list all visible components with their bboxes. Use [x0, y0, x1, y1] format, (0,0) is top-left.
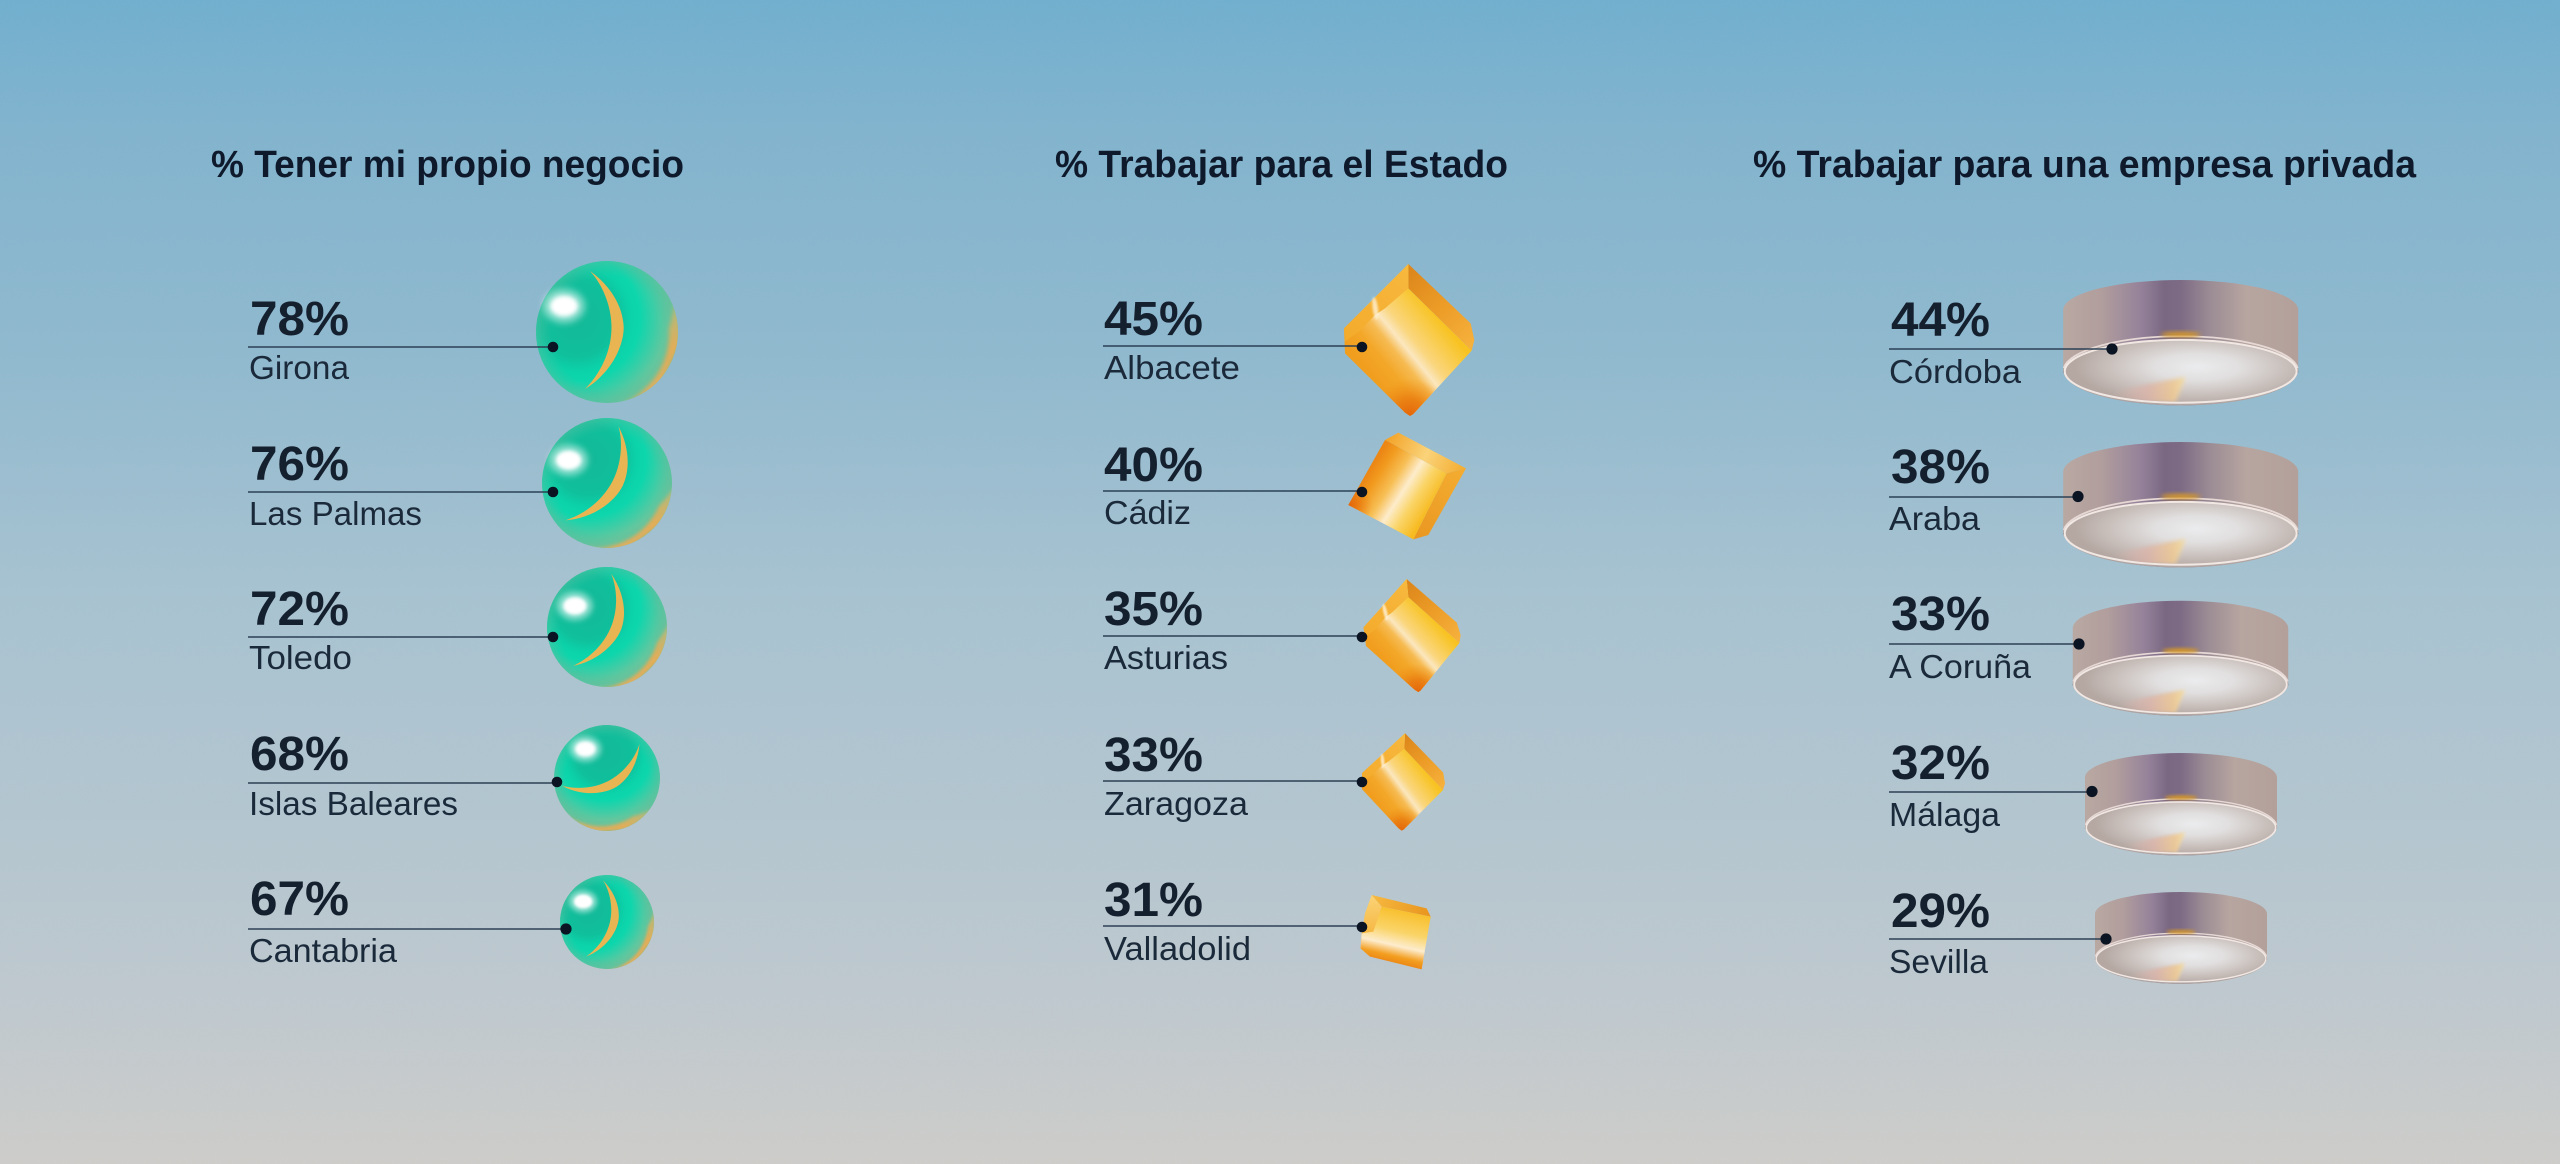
- row: Zaragoza: [1103, 729, 1447, 832]
- value: 44%: [1891, 294, 1990, 347]
- leader dot: [2100, 933, 2112, 945]
- icon: sphere: [516, 396, 702, 581]
- leader line: [248, 636, 553, 638]
- row: Albacete: [1103, 264, 1474, 416]
- leader line: [1103, 345, 1362, 347]
- leader dot: [2086, 786, 2098, 797]
- region name: Cádiz: [1104, 494, 1191, 531]
- leader dot: [560, 923, 572, 935]
- row: Girona: [248, 261, 687, 412]
- leader line: [1889, 791, 2092, 793]
- value: 45%: [1104, 293, 1203, 346]
- leader line: [248, 782, 557, 784]
- value: 29%: [1891, 885, 1990, 938]
- leader line: [248, 928, 566, 930]
- leader dot: [552, 777, 562, 787]
- heading: % Tener mi propio negocio: [211, 144, 684, 186]
- icon: disc: [2073, 601, 2288, 716]
- leader line: [1889, 643, 2079, 645]
- icon: cube: [1344, 264, 1474, 416]
- row: Cantabria: [248, 868, 667, 983]
- region name: Girona: [249, 349, 350, 386]
- icon: cube: [1359, 578, 1466, 693]
- region name: Las Palmas: [249, 495, 422, 532]
- value: 68%: [250, 728, 349, 781]
- row: Toledo: [248, 550, 691, 714]
- row: Araba: [1889, 441, 2298, 567]
- region name: Toledo: [249, 639, 352, 676]
- row: Islas Baleares: [248, 705, 683, 860]
- row: Las Palmas: [248, 396, 702, 581]
- leader line: [1103, 925, 1362, 927]
- region name: Córdoba: [1889, 353, 2022, 390]
- region name: Valladolid: [1104, 930, 1251, 967]
- icon: disc: [2063, 280, 2298, 405]
- heading: % Trabajar para una empresa privada: [1753, 144, 2417, 186]
- region name: Cantabria: [249, 932, 398, 969]
- leader dot: [2072, 491, 2084, 502]
- region name: A Coruña: [1889, 648, 2032, 685]
- leader line: [1889, 348, 2112, 350]
- region name: Zaragoza: [1104, 785, 1249, 822]
- icon: disc: [2085, 753, 2277, 856]
- icon: sphere: [536, 261, 687, 412]
- icon: sphere: [528, 550, 691, 714]
- value: 32%: [1891, 737, 1990, 790]
- leader dot: [2073, 638, 2085, 650]
- leader dot: [548, 342, 558, 352]
- value: 35%: [1104, 583, 1203, 636]
- leader line: [1103, 490, 1362, 492]
- region name: Araba: [1889, 500, 1981, 537]
- row: Valladolid: [1103, 874, 1431, 969]
- leader line: [1103, 780, 1362, 782]
- icon: sphere: [529, 705, 683, 860]
- row: Cádiz: [1103, 433, 1466, 539]
- region name: Málaga: [1889, 796, 2001, 833]
- value: 67%: [250, 873, 349, 926]
- icon: cube: [1360, 732, 1447, 832]
- value: 76%: [250, 438, 349, 491]
- row: Málaga: [1889, 737, 2277, 856]
- leader dot: [548, 632, 558, 642]
- leader line: [248, 346, 553, 348]
- value: 40%: [1104, 439, 1203, 492]
- leader dot: [2106, 343, 2118, 355]
- icon: disc: [2095, 892, 2267, 984]
- leader dot: [1357, 632, 1367, 642]
- region name: Albacete: [1104, 349, 1240, 386]
- leader dot: [1357, 487, 1367, 497]
- leader line: [1103, 635, 1362, 637]
- icon: disc: [2063, 442, 2298, 567]
- value: 33%: [1891, 588, 1990, 641]
- value: 31%: [1104, 874, 1203, 927]
- leader dot: [1357, 777, 1367, 787]
- leader dot: [1357, 342, 1367, 352]
- region name: Asturias: [1104, 639, 1228, 676]
- leader line: [1889, 938, 2106, 940]
- value: 33%: [1104, 729, 1203, 782]
- row: Sevilla: [1889, 885, 2267, 984]
- icon: cube: [1348, 433, 1466, 539]
- region name: Islas Baleares: [249, 785, 458, 822]
- value: 38%: [1891, 441, 1990, 494]
- icon: cube: [1361, 895, 1431, 969]
- leader dot: [548, 487, 558, 497]
- panel: Tener mi propio negocio: [211, 144, 702, 983]
- row: Córdoba: [1889, 280, 2298, 405]
- panel: Trabajar para el Estado: [1055, 144, 1508, 969]
- panel: Trabajar para una empresa privada: [1753, 144, 2417, 984]
- leader dot: [1357, 922, 1367, 932]
- value: 78%: [250, 293, 349, 346]
- heading: % Trabajar para el Estado: [1055, 144, 1508, 186]
- row: Asturias: [1103, 578, 1466, 693]
- icon: sphere: [552, 868, 667, 983]
- region name: Sevilla: [1889, 943, 1989, 980]
- leader line: [248, 491, 553, 493]
- row: A Coruña: [1889, 588, 2288, 716]
- leader line: [1889, 496, 2078, 498]
- value: 72%: [250, 583, 349, 636]
